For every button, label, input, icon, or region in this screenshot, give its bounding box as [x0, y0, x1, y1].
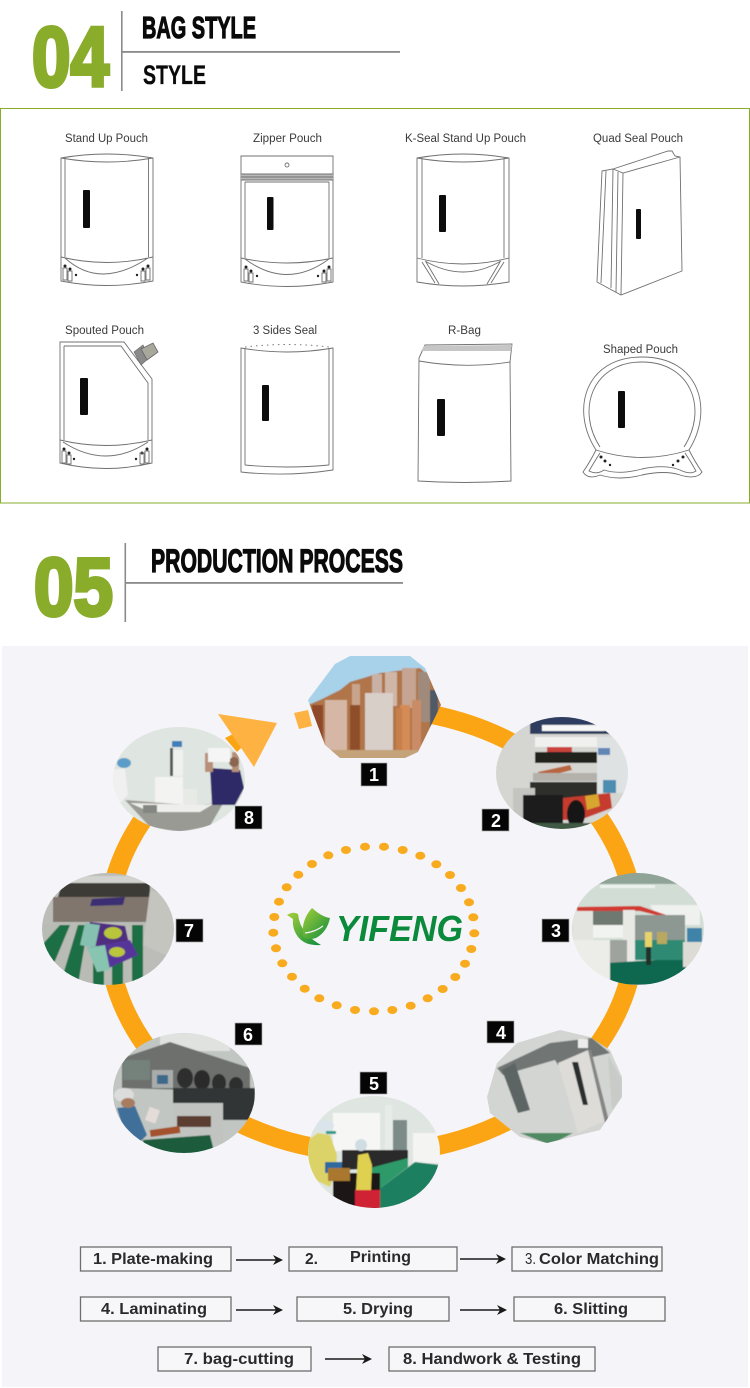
bag: 3 sides seal [241, 325, 333, 474]
heading: production process: PRODUCTION PROCESS [151, 543, 403, 579]
heading: bag style: BAG STYLE [142, 10, 256, 45]
logo: yifeng with dotted ring [268, 843, 479, 1015]
step box 3: 3. [525, 1251, 536, 1268]
step box 7: 7. bag-cutting [184, 1351, 294, 1368]
badge 6 [235, 1023, 262, 1045]
label: stand up pouch: Stand Up Pouch [65, 133, 148, 145]
label: shaped pouch: Shaped Pouch [603, 344, 678, 356]
badge 7 [176, 919, 203, 942]
arrow 2 to 3 [460, 1254, 506, 1264]
photo 8: handwork and testing [113, 727, 245, 831]
header: 05 production process [34, 542, 403, 633]
ring tail at arrow [225, 734, 242, 752]
subheading: style: STYLE [143, 60, 206, 90]
badge 7: 7 [184, 921, 194, 941]
label: zipper pouch: Zipper Pouch [253, 133, 322, 145]
header: 04 bag style [32, 10, 400, 104]
header rules [121, 11, 400, 91]
bag: stand up pouch [61, 133, 153, 286]
arrow 5 to 6 [460, 1305, 507, 1315]
photo 1: film rolls [308, 656, 441, 758]
step box 5 [297, 1297, 449, 1321]
photo 6: slitting machine [110, 1030, 260, 1155]
panel: bag styles frame [0, 108, 750, 503]
photo 4: laminating oven [487, 1030, 622, 1143]
photo 5: drying workers [305, 1095, 445, 1210]
badge 4: 4 [496, 1023, 506, 1043]
section number 05: 05 [34, 542, 113, 633]
bag: shaped pouch [583, 344, 702, 478]
badge 6: 6 [243, 1025, 253, 1045]
label: quad seal pouch: Quad Seal Pouch [593, 133, 683, 145]
badge 1 [361, 763, 387, 786]
step box 1: 1. Plate-making [93, 1251, 213, 1268]
icon: bird and leaf [287, 908, 330, 945]
label: k-seal stand up pouch: K-Seal Stand Up Pouch [405, 133, 526, 145]
icon: spout [134, 343, 158, 365]
bag: spouted pouch [60, 325, 158, 468]
step box 4 [80, 1297, 231, 1321]
step box 1 [80, 1247, 231, 1271]
arrow 7 to 8 [325, 1354, 372, 1364]
step box 5: 5. Drying [343, 1301, 413, 1318]
badge 1: 1 [369, 765, 379, 785]
step box 2: 2. [305, 1251, 318, 1268]
step box 8: 8. Handwork & Testing [403, 1351, 581, 1368]
step box 6: 6. Slitting [554, 1301, 628, 1318]
step box 7 [158, 1347, 311, 1371]
bag: k-seal stand up pouch [405, 133, 526, 286]
photo 3: color matching line [570, 872, 706, 987]
badge 8: 8 [244, 808, 254, 828]
badge 8 [235, 806, 262, 829]
step box 3: Color Matching [539, 1251, 659, 1268]
logo wordmark: YIFENG [336, 908, 463, 949]
bag: quad seal pouch [593, 133, 683, 295]
badge 5: 5 [369, 1074, 379, 1094]
bag: r-bag [418, 325, 512, 482]
ring end piece [294, 710, 312, 729]
section number 04: 04 [32, 10, 109, 104]
bag: zipper pouch [241, 133, 333, 286]
step box 8 [389, 1347, 595, 1371]
photo 7: bag cutting [40, 870, 176, 987]
label: spouted pouch: Spouted Pouch [65, 325, 144, 337]
step box 4: 4. Laminating [101, 1301, 207, 1318]
arrow 1 to 2 [236, 1255, 283, 1265]
label: r-bag: R-Bag [448, 325, 481, 337]
arrow head [218, 714, 277, 767]
photo 2: printing machine [495, 716, 630, 832]
label: 3 sides seal: 3 Sides Seal [253, 325, 317, 337]
badge 3: 3 [551, 921, 561, 941]
dotted ring [268, 843, 479, 1015]
badge 3 [542, 919, 569, 942]
badge 4 [487, 1021, 514, 1043]
badge 2 [482, 809, 509, 831]
panel: production process background [2, 646, 748, 1387]
badge 5 [360, 1072, 387, 1094]
process ring [108, 709, 636, 1153]
step box 3 [512, 1247, 662, 1271]
arrow 4 to 5 [236, 1305, 283, 1315]
step box 2 [289, 1247, 457, 1271]
badge 2: 2 [491, 811, 501, 831]
step box 6 [514, 1297, 665, 1321]
step box 2: Printing [350, 1249, 411, 1266]
header rules [124, 543, 403, 622]
